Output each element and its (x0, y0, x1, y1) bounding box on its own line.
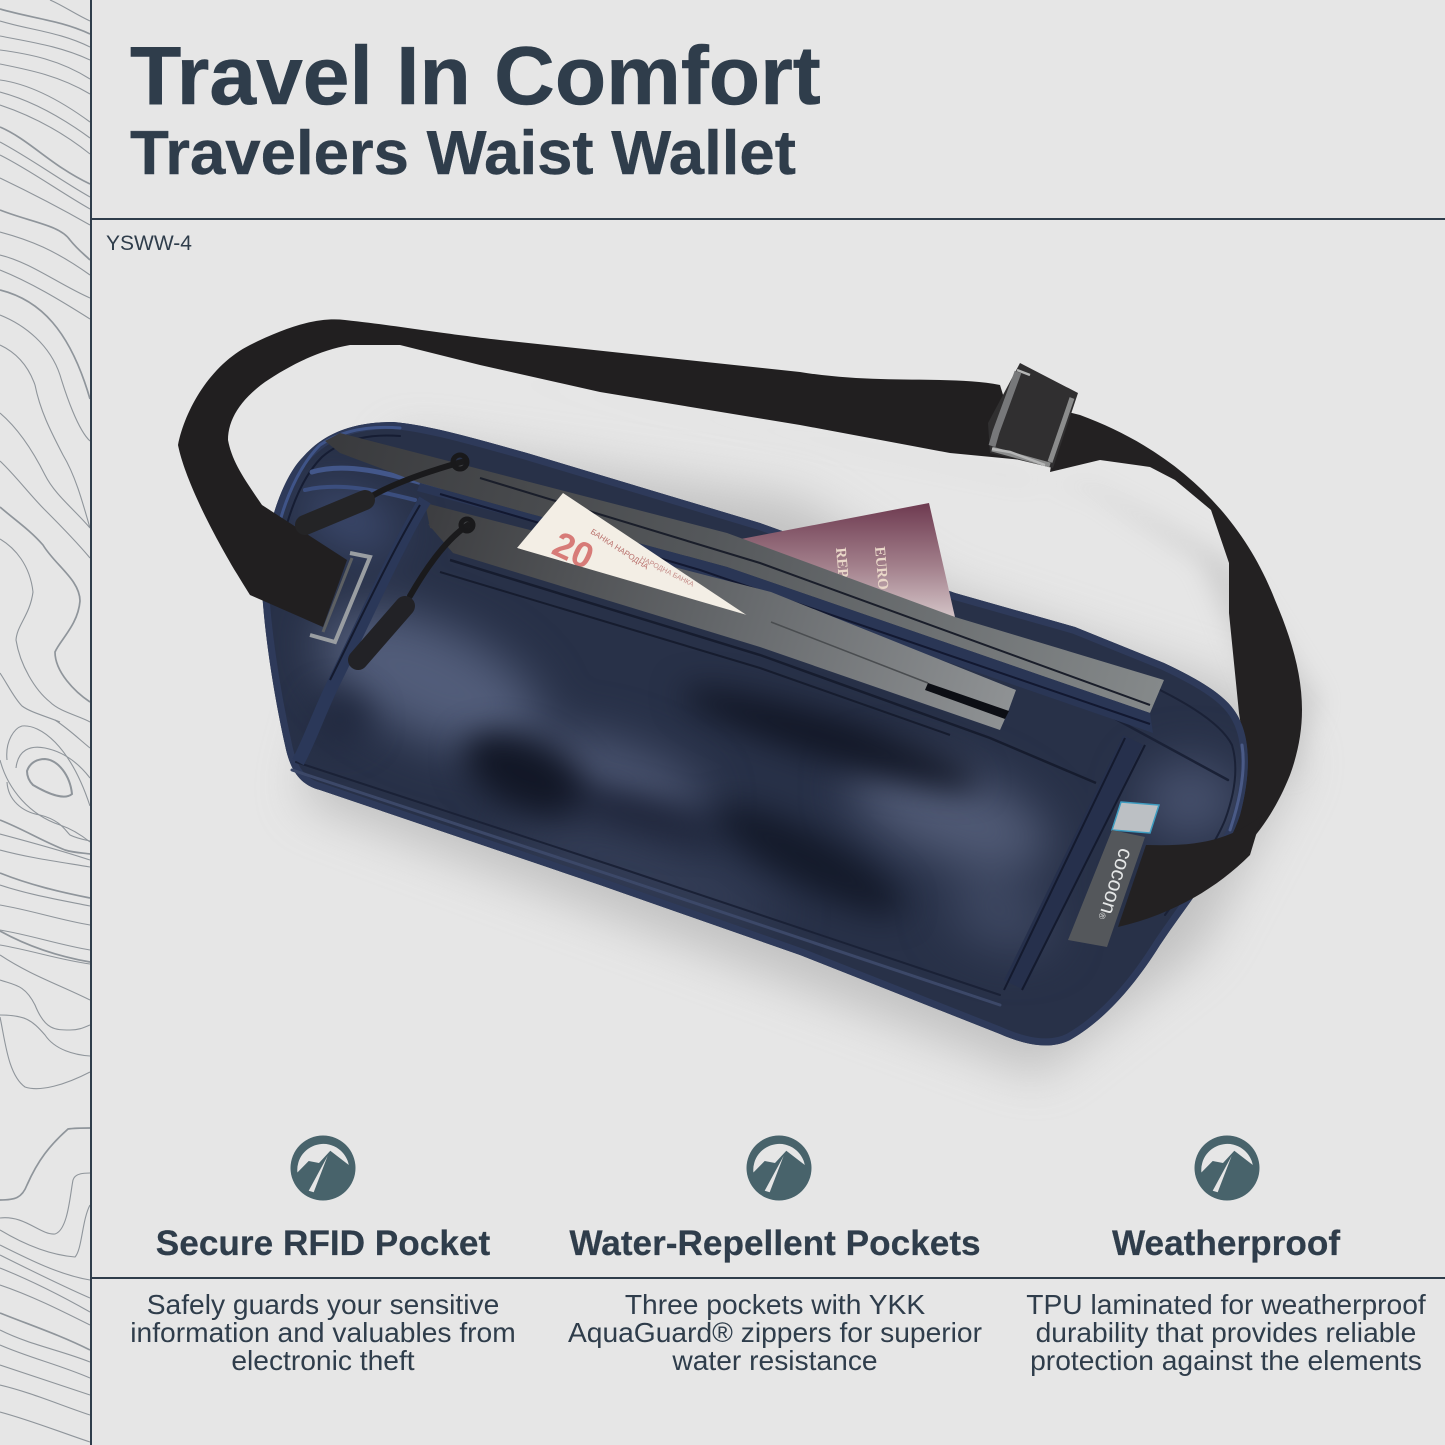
passport: REPU (832, 547, 852, 589)
heading: Water-Repellent Pockets: Water-Repellent Pockets (569, 1224, 981, 1263)
text: weatherproof description: TPU laminated for weatherproof (1026, 1288, 1426, 1320)
title: Travel In Comfort (130, 29, 821, 122)
metal slider (310, 553, 370, 642)
banknote (517, 493, 766, 628)
text: RFID description: electronic theft (231, 1344, 415, 1376)
text: pockets description: water resistance (672, 1344, 878, 1376)
text: pockets description: Three pockets with YKK (625, 1288, 925, 1320)
icon: mountain badge 3 (1194, 1136, 1260, 1200)
text: RFID description: Safely guards your sensitive (147, 1288, 499, 1320)
zipper back lip (425, 503, 1016, 712)
upper zipper pull (305, 455, 467, 525)
adjuster buckle (988, 363, 1078, 468)
banknote: 20 (547, 523, 600, 577)
topographic contour sidebar (0, 0, 90, 1442)
text: RFID description: information and valuables from (130, 1316, 516, 1348)
zipper front lip (428, 524, 1008, 730)
lower zipper pull (358, 519, 473, 660)
model code: YSWW-4 (106, 232, 192, 255)
lower pocket seams (298, 500, 1145, 990)
lower strap over bag (1118, 815, 1262, 927)
bag stitching (272, 427, 1243, 1005)
dark outer rim (262, 422, 1248, 1045)
icon: mountain badge 2 (746, 1136, 812, 1200)
text: RFID description (130, 1288, 516, 1376)
passport (720, 503, 955, 617)
strap: right section (1050, 410, 1302, 880)
waist wallet product photo (178, 319, 1320, 1075)
cocoon label (1068, 802, 1159, 947)
passport: EURO (871, 546, 891, 591)
text: weatherproof description: protection against the elements (1030, 1344, 1422, 1376)
blue strip between zippers (417, 483, 1153, 733)
drop shadow (300, 375, 1320, 1075)
strap: top and left section (178, 319, 1023, 627)
text: pockets description: AquaGuard® zippers for superior (568, 1316, 982, 1348)
upper zipper band (325, 433, 1164, 713)
text: weatherproof description (1026, 1288, 1426, 1376)
cocoon label: cocoon® (1093, 846, 1137, 924)
heading: Secure RFID Pocket: Secure RFID Pocket (156, 1224, 490, 1263)
banknote: НАРОДНА БАНКА (639, 556, 695, 589)
heading: Weatherproof: Weatherproof (1112, 1224, 1340, 1263)
text: pockets description (568, 1288, 982, 1376)
text: weatherproof description: durability that provides reliable (1036, 1316, 1416, 1348)
bag body (262, 422, 1248, 1046)
banknote: БАНКА НАРОДНА (589, 527, 651, 572)
icon: mountain badge 1 (290, 1136, 356, 1200)
subtitle: Travelers Waist Wallet (130, 118, 796, 188)
feature icons (290, 1136, 1260, 1200)
